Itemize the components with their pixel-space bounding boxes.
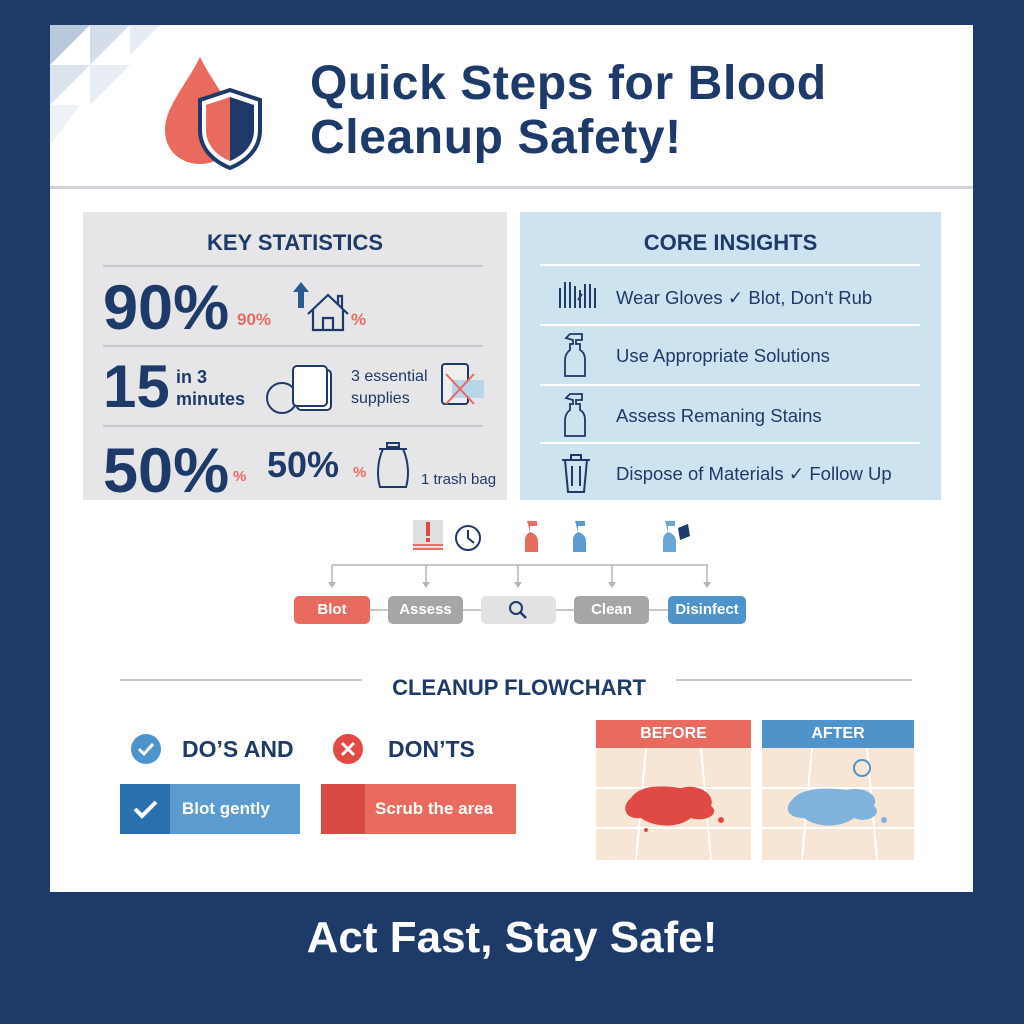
flowchart connectors [328,564,711,588]
do box: blot gently [120,784,300,834]
stat: 90%: 90% [237,310,271,329]
stat: 50%: % [233,468,246,485]
stat: 50%: 1 trash bag [421,471,496,488]
footer slogan: Act Fast, Stay Safe! [307,913,717,962]
heading: key statistics: KEY STATISTICS [207,230,383,255]
flow step: Assess: Assess [399,601,452,618]
flow step: Assess [388,596,463,624]
main white panel [50,25,973,892]
insight: dispose: Dispose of Materials ✓ Follow Up [616,463,892,484]
panel: core insights [520,212,941,500]
flow step: Blot: Blot [317,601,347,618]
flow step: Clean: Clean [591,601,632,618]
stat: 15 in 3 minutes: in 3 [176,367,207,387]
stat: 90% [103,273,366,343]
decorative corner pattern [50,25,160,144]
do's and don'ts heading [131,734,475,764]
stat: 15 in 3 minutes: 3 essential [351,368,428,385]
after image: AFTER [811,725,865,742]
stat: 50%: 50% [267,444,339,485]
do's and don'ts heading: DO’S AND [182,736,294,762]
insight: gloves [559,282,872,308]
flow step: Clean [574,596,649,624]
flow step: Blot [294,596,370,624]
don't box: scrub the area [321,784,516,834]
insight: assess [564,393,822,437]
stat: 90%: 90% [103,273,229,343]
insight: gloves: Wear Gloves ✓ Blot, Don't Rub [616,287,872,308]
stat: 50%: % [353,464,366,481]
flowchart icons [413,520,690,552]
title: Quick Steps for Blood [310,57,827,110]
flow step: inspect [481,596,556,624]
flow step: Disinfect: Disinfect [675,601,739,618]
stat: 15 in 3 minutes: minutes [176,389,245,409]
stat: 90%: % [351,310,366,329]
before image: BEFORE [640,725,707,742]
do's and don'ts heading: DON’TS [388,736,475,762]
title: Cleanup Safety! [310,111,682,164]
stat: 50% [103,436,496,506]
insight: solutions: Use Appropriate Solutions [616,345,830,366]
stat: 15 in 3 minutes [103,353,484,420]
don't box: scrub the area: Scrub the area [375,799,493,818]
icon: blood drop with shield [165,57,262,170]
do box: blot gently: Blot gently [182,799,270,818]
heading: cleanup flowchart: CLEANUP FLOWCHART [392,675,646,700]
panel: key statistics [83,212,507,500]
insight: solutions [564,333,830,377]
title [310,57,827,164]
before image [596,720,751,860]
flow step: Disinfect [668,596,746,624]
insight: dispose [562,454,892,493]
insight: assess: Assess Remaning Stains [616,405,822,426]
heading: core insights: CORE INSIGHTS [644,230,817,255]
after image [762,720,914,860]
stat: 15 in 3 minutes: supplies [351,390,410,407]
stat: 15 in 3 minutes: 15 [103,353,170,420]
stat: 50%: 50% [103,436,229,506]
